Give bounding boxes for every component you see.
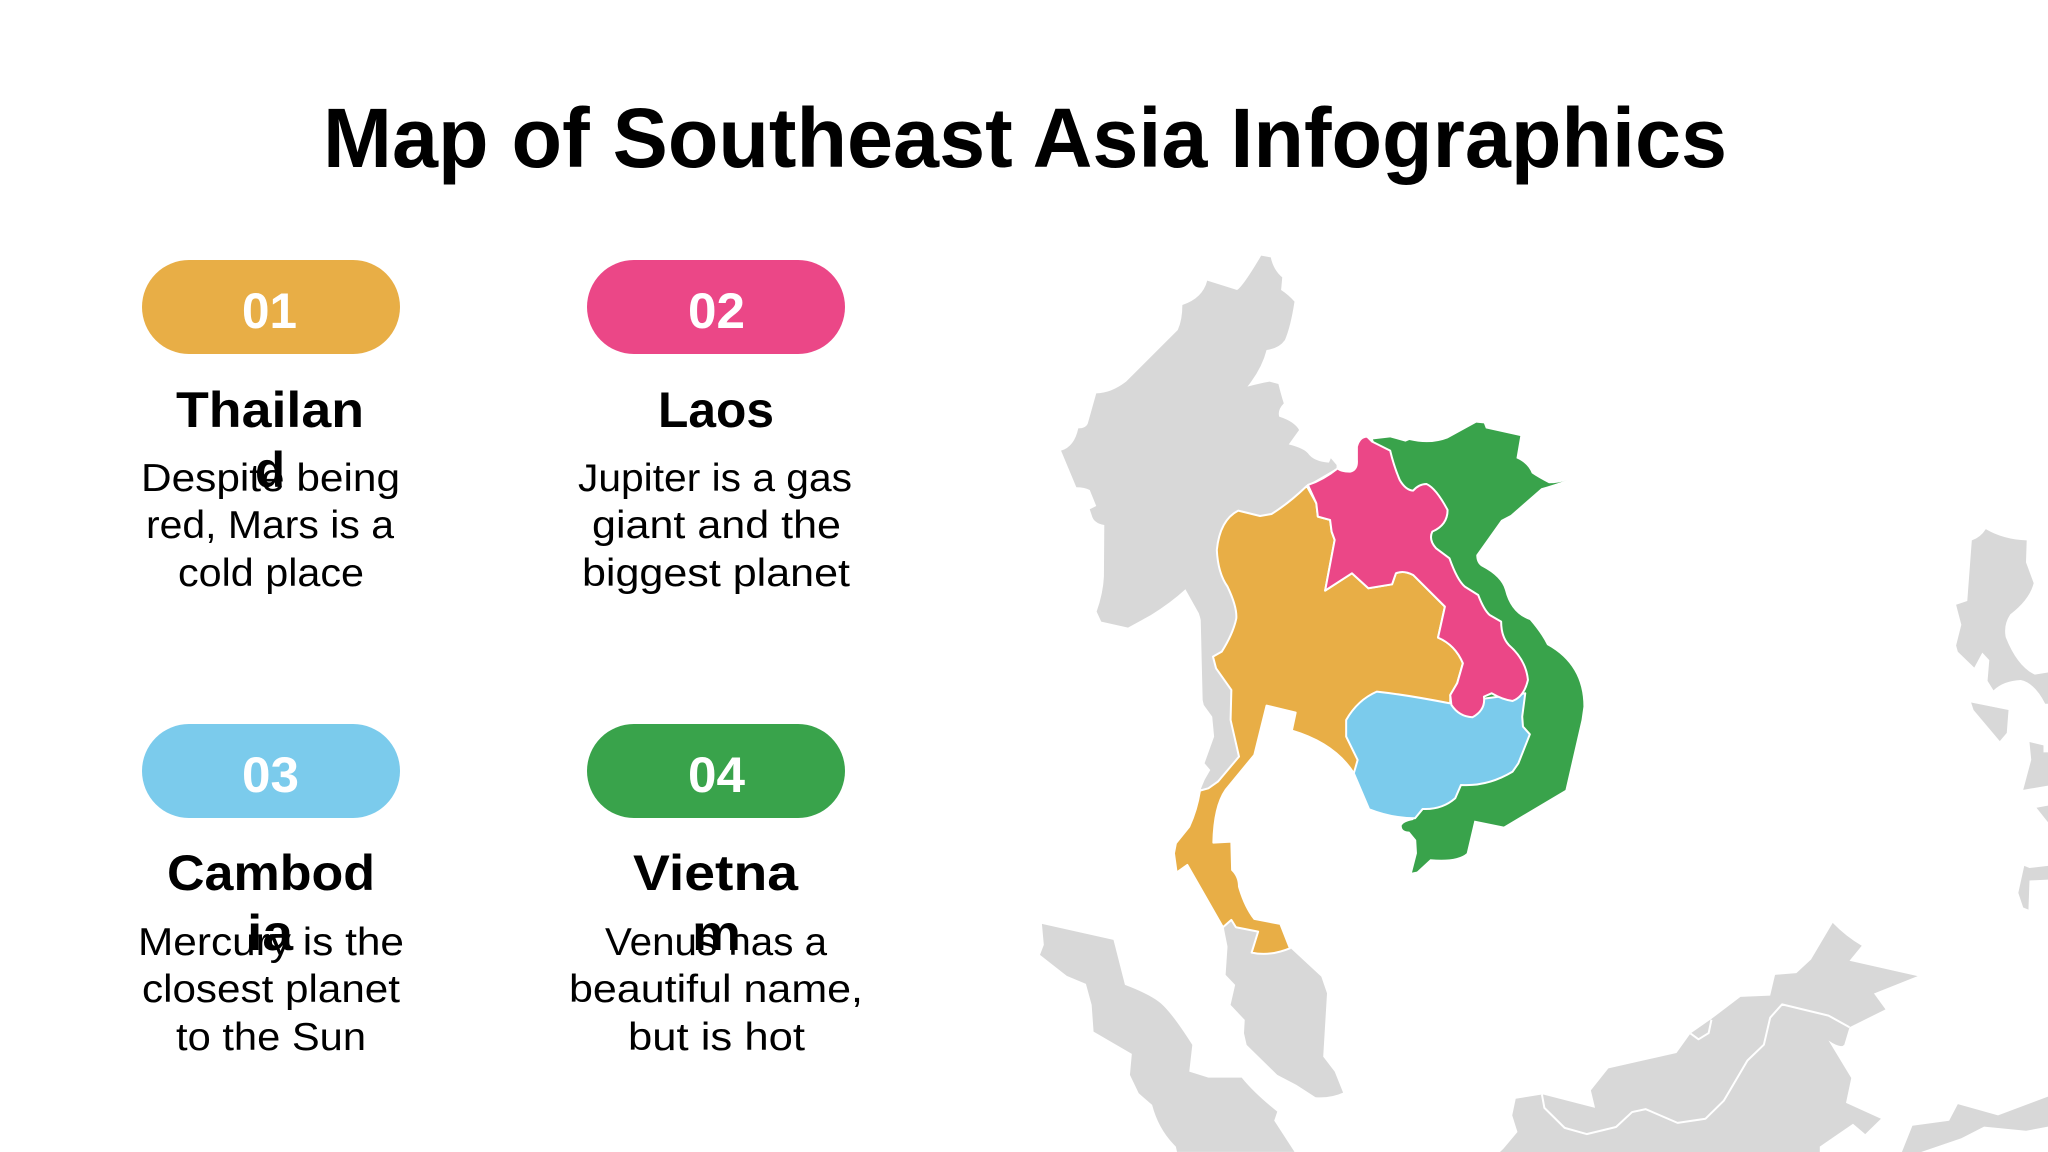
- text: Cambodia description: closest planet: [142, 968, 400, 1011]
- panel: Vietnam: [569, 724, 863, 1059]
- map: Sulawesi: [1902, 1097, 2048, 1152]
- text: Vietnam description: beautiful name,: [569, 968, 863, 1011]
- panel: Thailand: [141, 260, 400, 595]
- badge 01: [142, 260, 400, 354]
- panel: Laos: [578, 260, 852, 595]
- text: Laos description: [578, 457, 852, 595]
- map: Philippines: [1956, 529, 2048, 910]
- heading: Vietnam: m: [692, 905, 741, 961]
- map: Borneo: [1500, 923, 1918, 1152]
- map: Malay peninsula: [1224, 921, 1343, 1097]
- text: Vietnam description: [569, 921, 863, 1059]
- map: Sumatra: [1040, 924, 1294, 1152]
- map: Laos: [1308, 437, 1528, 717]
- text: Thailand description: Despite being: [141, 457, 400, 500]
- badge 02: [587, 260, 845, 354]
- title: Map of Southeast Asia Infographics: [323, 91, 1727, 185]
- heading: Thailand: d: [255, 442, 285, 498]
- heading: Cambodia: [167, 845, 375, 961]
- heading: Thailand: [176, 382, 364, 498]
- heading: Thailand: Thailan: [176, 382, 364, 438]
- badge 02: 02: [688, 283, 745, 339]
- text: Thailand description: cold place: [178, 552, 364, 595]
- text: Cambodia description: Mercury is the: [138, 921, 404, 964]
- map: islands: [1500, 529, 2048, 1152]
- text: Thailand description: [141, 457, 400, 595]
- text: Cambodia description: to the Sun: [176, 1016, 366, 1059]
- heading: Vietnam: [633, 845, 799, 961]
- heading: Cambodia: ia: [247, 905, 294, 961]
- badge 03: [142, 724, 400, 818]
- badge 03: 03: [242, 747, 299, 803]
- text: Laos description: Jupiter is a gas: [578, 457, 852, 500]
- heading: Laos: Laos: [658, 382, 774, 438]
- map: Cambodia: [1346, 692, 1530, 818]
- badge 04: 04: [688, 747, 745, 803]
- map: Thailand: [1174, 486, 1463, 954]
- badge 04: [587, 724, 845, 818]
- text: Laos description: biggest planet: [582, 552, 850, 595]
- map: Myanmar: [1061, 256, 1337, 789]
- map: mainland countries: [1040, 256, 1583, 1152]
- heading: Vietnam: Vietna: [633, 845, 799, 901]
- map of Southeast Asia: [1040, 256, 2048, 1152]
- heading: Cambodia: Cambod: [167, 845, 375, 901]
- panel: Cambodia: [138, 724, 404, 1059]
- text: Vietnam description: but is hot: [628, 1016, 805, 1059]
- text: Cambodia description: [138, 921, 404, 1059]
- badge 01: 01: [242, 283, 297, 339]
- text: Vietnam description: Venus has a: [605, 921, 827, 964]
- text: Thailand description: red, Mars is a: [146, 504, 394, 547]
- text: Laos description: giant and the: [592, 504, 841, 547]
- map: Vietnam: [1373, 423, 1583, 873]
